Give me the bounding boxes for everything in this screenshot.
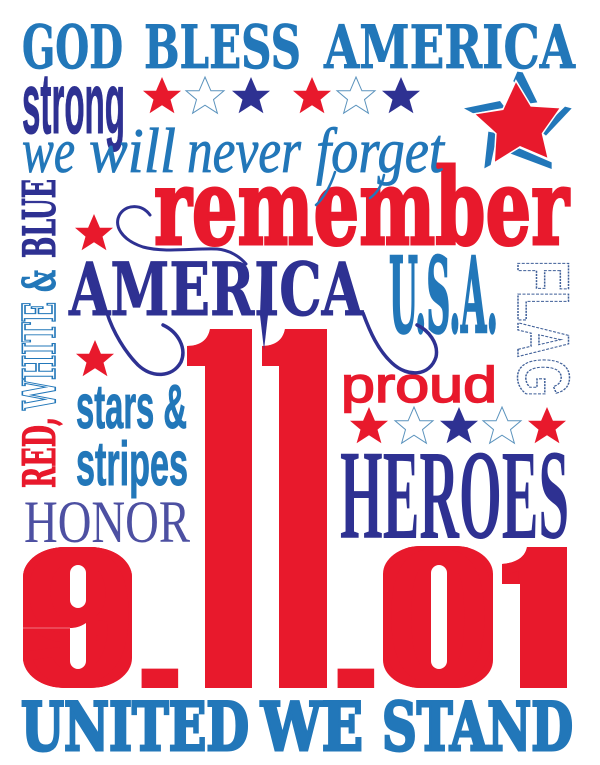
words: stars & stripes <box>76 373 188 499</box>
digit 0: 0 <box>378 502 498 731</box>
script line: we will never forget <box>22 115 446 205</box>
first period: . <box>124 570 196 716</box>
word: America with swashes: AMERICA <box>68 247 364 333</box>
last 1: 1 <box>432 503 600 732</box>
star row: top <box>143 77 420 113</box>
script line: we will never forget: never <box>187 115 302 186</box>
footer: United We Stand <box>21 688 573 765</box>
script line: we will never forget: we <box>22 115 75 186</box>
icon: red star left lower <box>76 340 114 376</box>
swashes around America <box>107 207 437 374</box>
vertical text: Red, White & Blue: WHITE <box>13 302 66 411</box>
digit 9 <box>23 547 132 688</box>
second tall 1 <box>262 329 327 688</box>
digit 0 <box>383 546 493 688</box>
footer: United We Stand: UNITED <box>21 688 249 765</box>
words: stars & stripes: stars & <box>76 373 187 442</box>
script line: we will never forget: forget <box>316 115 446 186</box>
vertical text: Red, White & Blue: BLUE <box>13 179 66 258</box>
last 1 <box>502 547 567 688</box>
star row: right <box>350 407 566 443</box>
icon: red star left upper <box>75 214 113 250</box>
footer: United We Stand: WE <box>260 688 363 765</box>
date: 9.11.01 <box>23 329 567 688</box>
word: Honor: HONOR <box>24 489 190 555</box>
vertical text: Red, White & Blue <box>13 179 66 488</box>
words: stars & stripes: stripes <box>76 430 188 499</box>
vertical text: Red, White & Blue: & <box>13 270 66 292</box>
vertical text: Red, White & Blue: RED, <box>13 417 66 488</box>
first tall 1 <box>187 329 252 688</box>
heading: God Bless America <box>22 13 576 83</box>
icon: large red star with blue offset strips <box>464 72 572 169</box>
digit 9: 9 <box>16 502 142 731</box>
second period: . <box>320 570 392 716</box>
word: Flag dashed outline: FLAG <box>502 260 583 397</box>
text: strong <box>22 56 125 152</box>
word: America with swashes <box>68 207 437 374</box>
heading: God Bless America: GOD <box>22 13 123 83</box>
word: proud: proud <box>341 357 497 413</box>
script line: we will never forget: will <box>89 115 176 186</box>
heading: God Bless America: BLESS <box>144 13 301 83</box>
